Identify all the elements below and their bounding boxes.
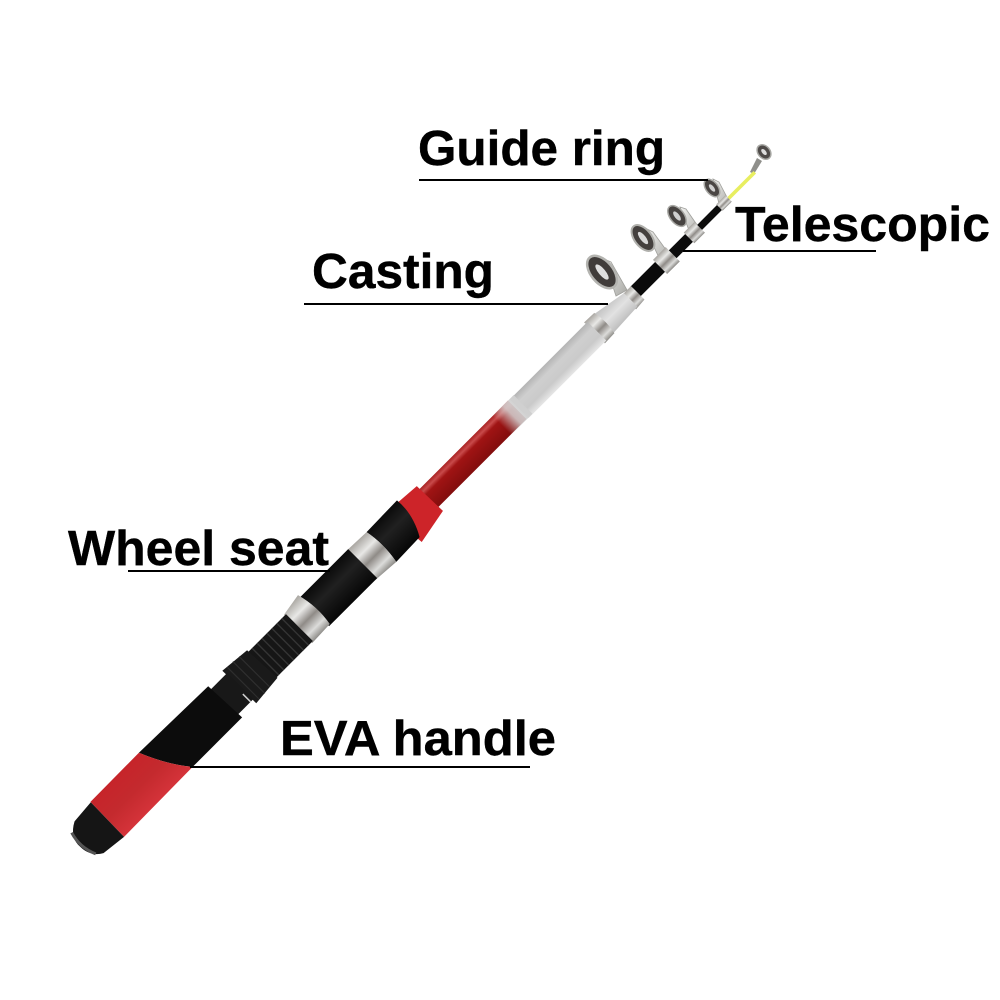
black EVA grip [139, 683, 242, 787]
guide ring: fourth [701, 176, 730, 208]
black foam grip [366, 500, 428, 562]
label: Casting: Casting [312, 244, 494, 299]
red EVA grip [89, 733, 193, 837]
butt cap [63, 802, 125, 864]
rod body, drawn along its axis [62, 155, 773, 865]
label: Guide ring: Guide ring [418, 121, 665, 176]
red foam collar [386, 483, 448, 545]
silver section with ring [584, 288, 640, 343]
yellow tip section [725, 171, 756, 202]
guide ring: tip [750, 142, 774, 174]
guide ring: first [581, 250, 627, 296]
black reel seat tube [300, 549, 377, 626]
label: Wheel seat: Wheel seat [68, 521, 329, 576]
silver tube section [510, 322, 606, 418]
metal collars [620, 191, 738, 309]
red tube section [416, 401, 526, 511]
handle neck [210, 673, 253, 716]
threaded section [248, 614, 313, 679]
label: Telescopic: Telescopic [735, 197, 990, 252]
black tip sections [630, 201, 726, 297]
fishing rod [62, 142, 774, 865]
silver ring lower [281, 593, 332, 643]
silver ring upper [346, 530, 398, 582]
reel lock knob [222, 647, 280, 704]
red to silver fade [492, 395, 532, 435]
label: EVA handle: EVA handle [280, 711, 556, 766]
guide ring: third [664, 202, 702, 238]
guide ring: second [627, 221, 672, 264]
